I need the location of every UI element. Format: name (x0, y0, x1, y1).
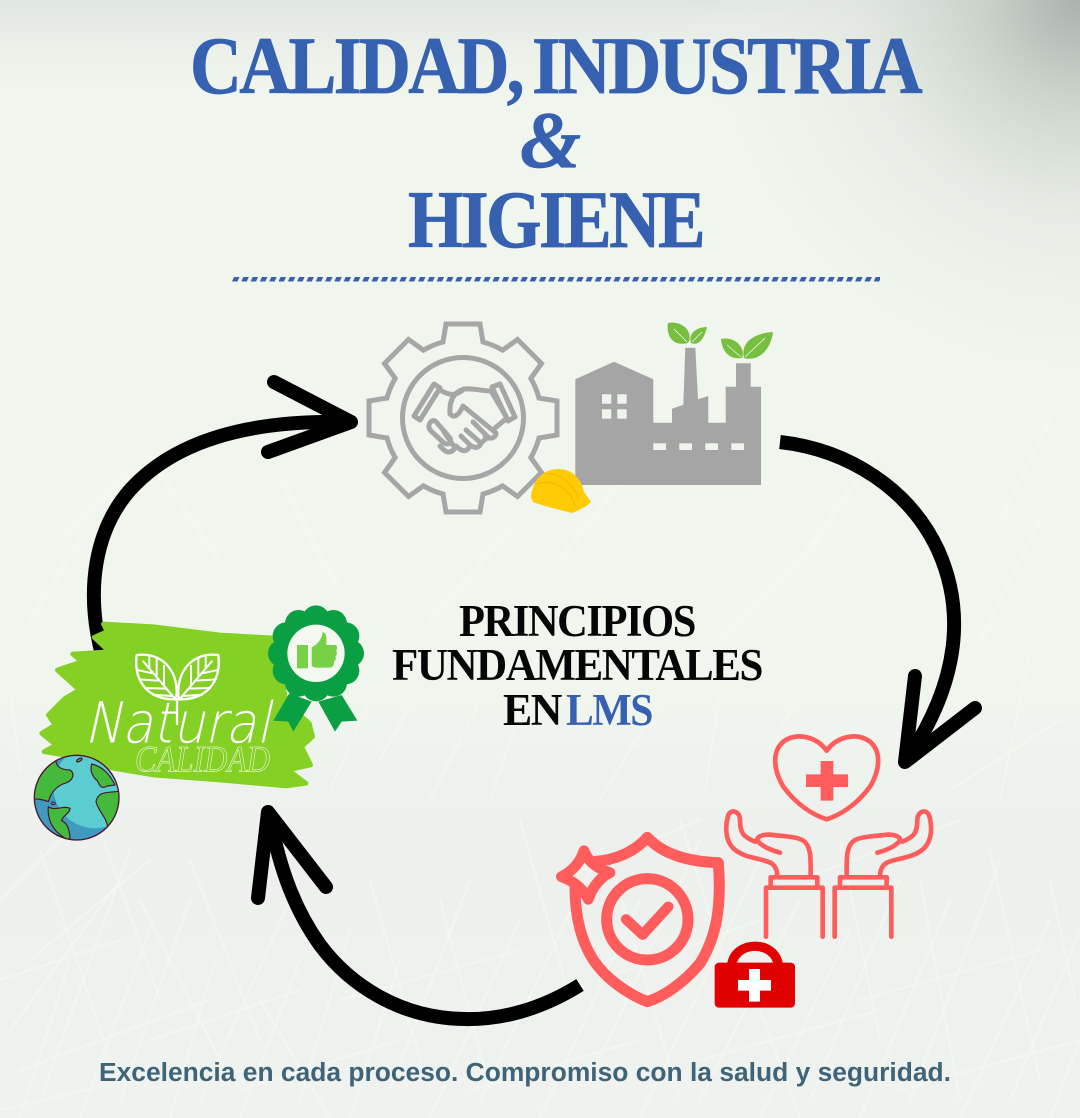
icon: factory with leaves (575, 323, 773, 485)
icon: shield with check (561, 837, 719, 1002)
arrow: recycling right (780, 442, 975, 762)
title (190, 20, 922, 265)
title: & (520, 97, 581, 185)
icon: heart and caring hands (726, 736, 931, 937)
green brush stroke (42, 624, 313, 786)
icon: globe (34, 754, 120, 841)
arrow: recycling bottom (258, 812, 580, 1019)
footer tagline: Excelencia en cada proceso. Compromiso con la salud y seguridad. (99, 1059, 951, 1087)
title divider (232, 276, 880, 282)
Calidad wordmark: CALIDAD (135, 740, 270, 781)
icon: yellow hard hat (531, 469, 591, 513)
arrow: recycling top-left (94, 382, 351, 655)
icon: first aid kit (715, 946, 795, 1008)
icon: approval badge (268, 605, 364, 732)
center heading: PRINCIPIOS (459, 596, 695, 646)
white leaves (136, 655, 219, 725)
title: HIGIENE (408, 174, 703, 265)
icon: natural calidad logo (42, 624, 313, 786)
title: INDUSTRIA (532, 20, 922, 111)
center heading: FUNDAMENTALES (392, 640, 762, 690)
center heading: EN (503, 685, 562, 735)
icon: gear with handshake (369, 324, 557, 512)
Natural wordmark: Natural (84, 691, 274, 757)
title: CALIDAD, (190, 20, 522, 111)
center heading (392, 596, 762, 735)
center heading: LMS (566, 685, 652, 735)
